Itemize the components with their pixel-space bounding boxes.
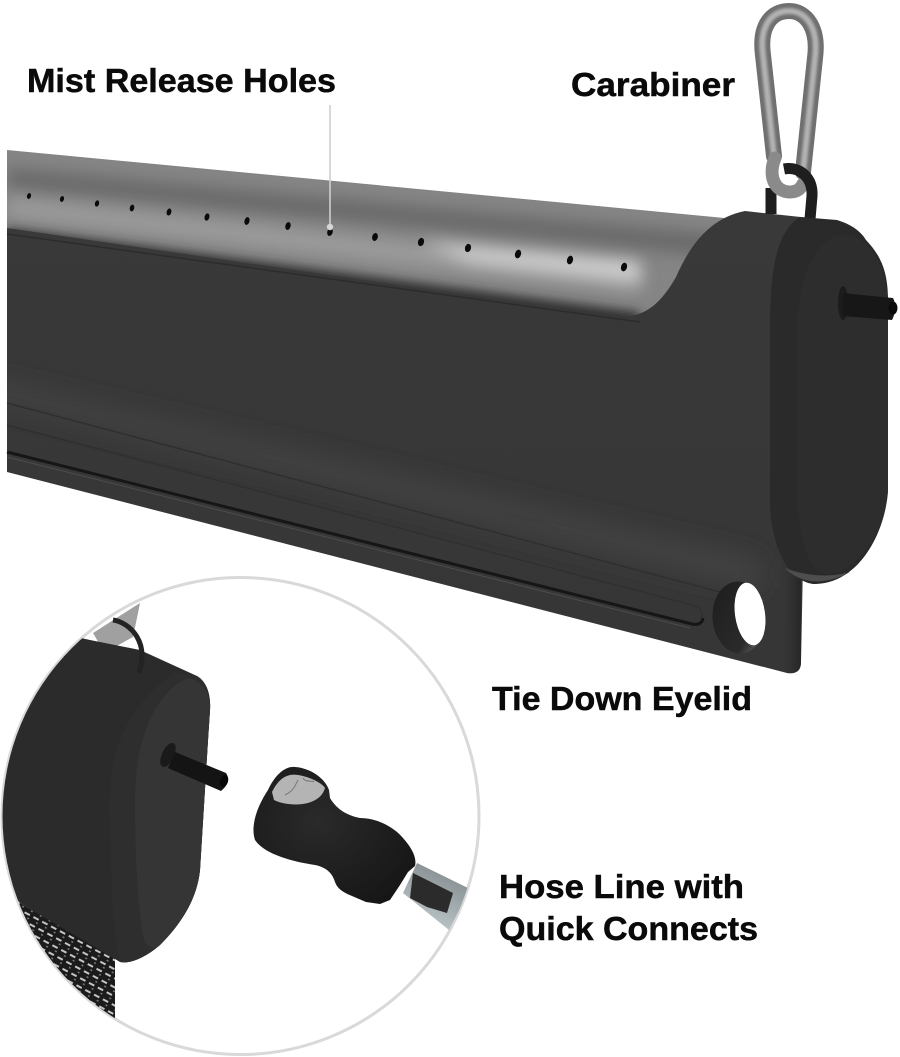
inset carabiner fragment — [93, 603, 140, 648]
label: Tie Down Eyelid: Tie Down Eyelid — [492, 680, 752, 717]
end cap — [770, 217, 888, 584]
label: Mist Release Holes: Mist Release Holes — [27, 62, 336, 99]
detail circle inset — [0, 578, 479, 1054]
inset d-ring — [113, 620, 142, 673]
label: Hose Line with Quick Connects: Hose Line with — [499, 868, 744, 905]
body grooves — [7, 234, 720, 628]
label: Carabiner: Carabiner — [571, 66, 735, 103]
mist release holes — [26, 193, 628, 272]
inset fabric strap — [19, 903, 115, 1018]
body sheen — [246, 450, 801, 674]
mist bar product — [0, 11, 898, 675]
leader line: mist release holes — [327, 105, 333, 230]
bar top reflective section — [7, 150, 724, 317]
inset end cap — [0, 620, 210, 962]
bar dark body — [7, 211, 810, 673]
inset hose barb — [157, 741, 230, 791]
label: Hose Line with Quick Connects: Quick Connects — [499, 910, 758, 947]
hose barb nozzle — [838, 286, 898, 320]
quick connect hose line — [253, 767, 470, 930]
carabiner — [762, 11, 816, 219]
label: Hose Line with Quick Connects — [499, 868, 758, 947]
tie down eyelid — [710, 580, 769, 655]
